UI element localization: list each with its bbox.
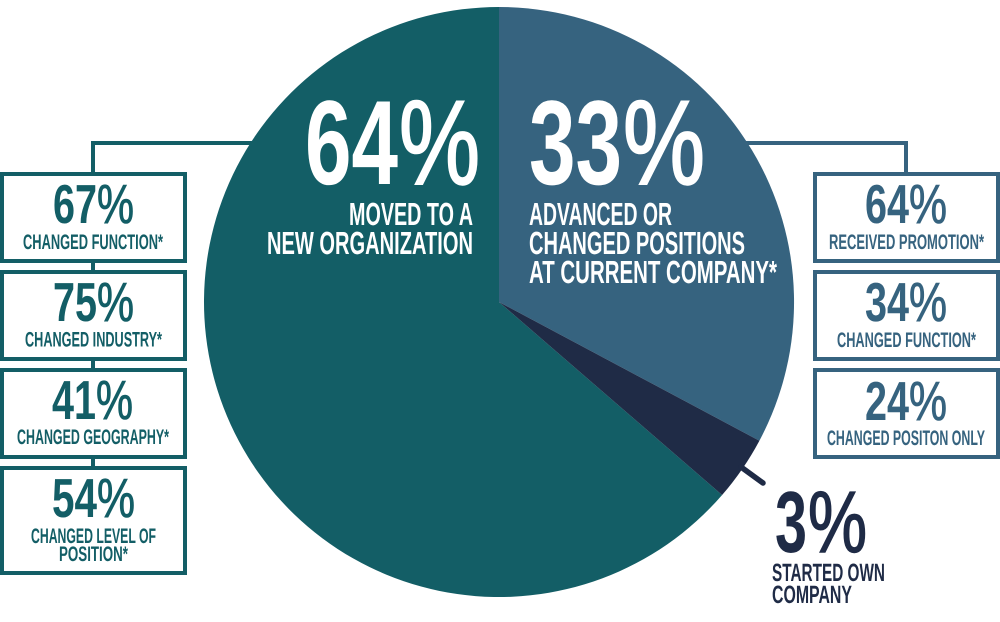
panel: changed position only 24: % [909, 370, 947, 432]
callout: 3 percent started own company [741, 467, 885, 609]
callout: 64 percent moved [267, 76, 480, 261]
slice: moved to a new organization [204, 7, 722, 597]
panel: changed function 67: 67 [53, 173, 97, 235]
panel: changed geography 41: % [96, 369, 133, 431]
panel: changed level of position 54: % [97, 467, 135, 529]
panel: changed level of position 54 [2, 467, 185, 573]
label: started own company: STARTED OWN [772, 559, 885, 587]
panel: changed level of position 54: POSITION* [59, 543, 129, 566]
panel: changed industry 75: 75 [53, 271, 97, 333]
value: 33%: 33 [529, 76, 622, 210]
value: 64%: % [399, 76, 480, 210]
panel: changed geography 41: CHANGED GEOGRAPHY* [17, 426, 169, 449]
value: 3%: % [808, 474, 867, 571]
connector: right bracket [745, 141, 908, 173]
label: started own company: COMPANY [772, 581, 852, 609]
pointer tick [741, 467, 763, 483]
slice: started own company [499, 302, 759, 495]
panel: changed position only 24: 24 [865, 370, 909, 432]
panel: received promotion 64: % [909, 173, 947, 235]
panel: changed function 34 [815, 271, 998, 359]
panel: changed geography 41: 41 [52, 369, 96, 431]
slice: advanced or changed positions [499, 7, 794, 441]
panel: changed function 34: % [909, 271, 947, 333]
panel: changed function 67: CHANGED FUNCTION* [23, 231, 164, 254]
label: advanced or changed positions at current company [529, 196, 777, 290]
panel: changed function 34: 34 [865, 271, 909, 333]
panel: changed industry 75: % [97, 271, 134, 333]
panel: changed function 67: % [97, 173, 134, 235]
label: advanced or changed positions at current company: AT CURRENT COMPANY* [529, 254, 777, 290]
label: advanced or changed positions at current company: ADVANCED OR [529, 196, 672, 232]
panel: changed position only 24 [815, 370, 998, 457]
value: 3% [775, 474, 867, 571]
panel: changed industry 75: CHANGED INDUSTRY* [25, 328, 163, 352]
panel: changed level of position 54: CHANGED LEVEL OF [31, 525, 156, 548]
label: moved to a new organization: MOVED TO A [349, 196, 473, 232]
value: 33%: % [623, 76, 705, 210]
value: 3%: 3 [775, 474, 807, 571]
label: moved to a new organization: NEW ORGANIZATION [267, 225, 473, 261]
panel: changed function 67 [2, 173, 185, 261]
label: started own company [772, 559, 885, 609]
pie chart [204, 7, 794, 597]
connector: left bracket [91, 141, 256, 481]
panel: changed industry 75 [2, 271, 185, 359]
label: moved to a new organization [267, 196, 473, 261]
value: 64%: 64 [305, 76, 398, 210]
callout: 33 percent advanced [529, 76, 777, 290]
panel: received promotion 64 [815, 173, 998, 261]
label: advanced or changed positions at current company: CHANGED POSITIONS [529, 225, 745, 261]
panel: received promotion 64: 64 [865, 173, 909, 235]
panel: changed geography 41 [2, 369, 185, 457]
panel: changed level of position 54: 54 [52, 467, 97, 529]
